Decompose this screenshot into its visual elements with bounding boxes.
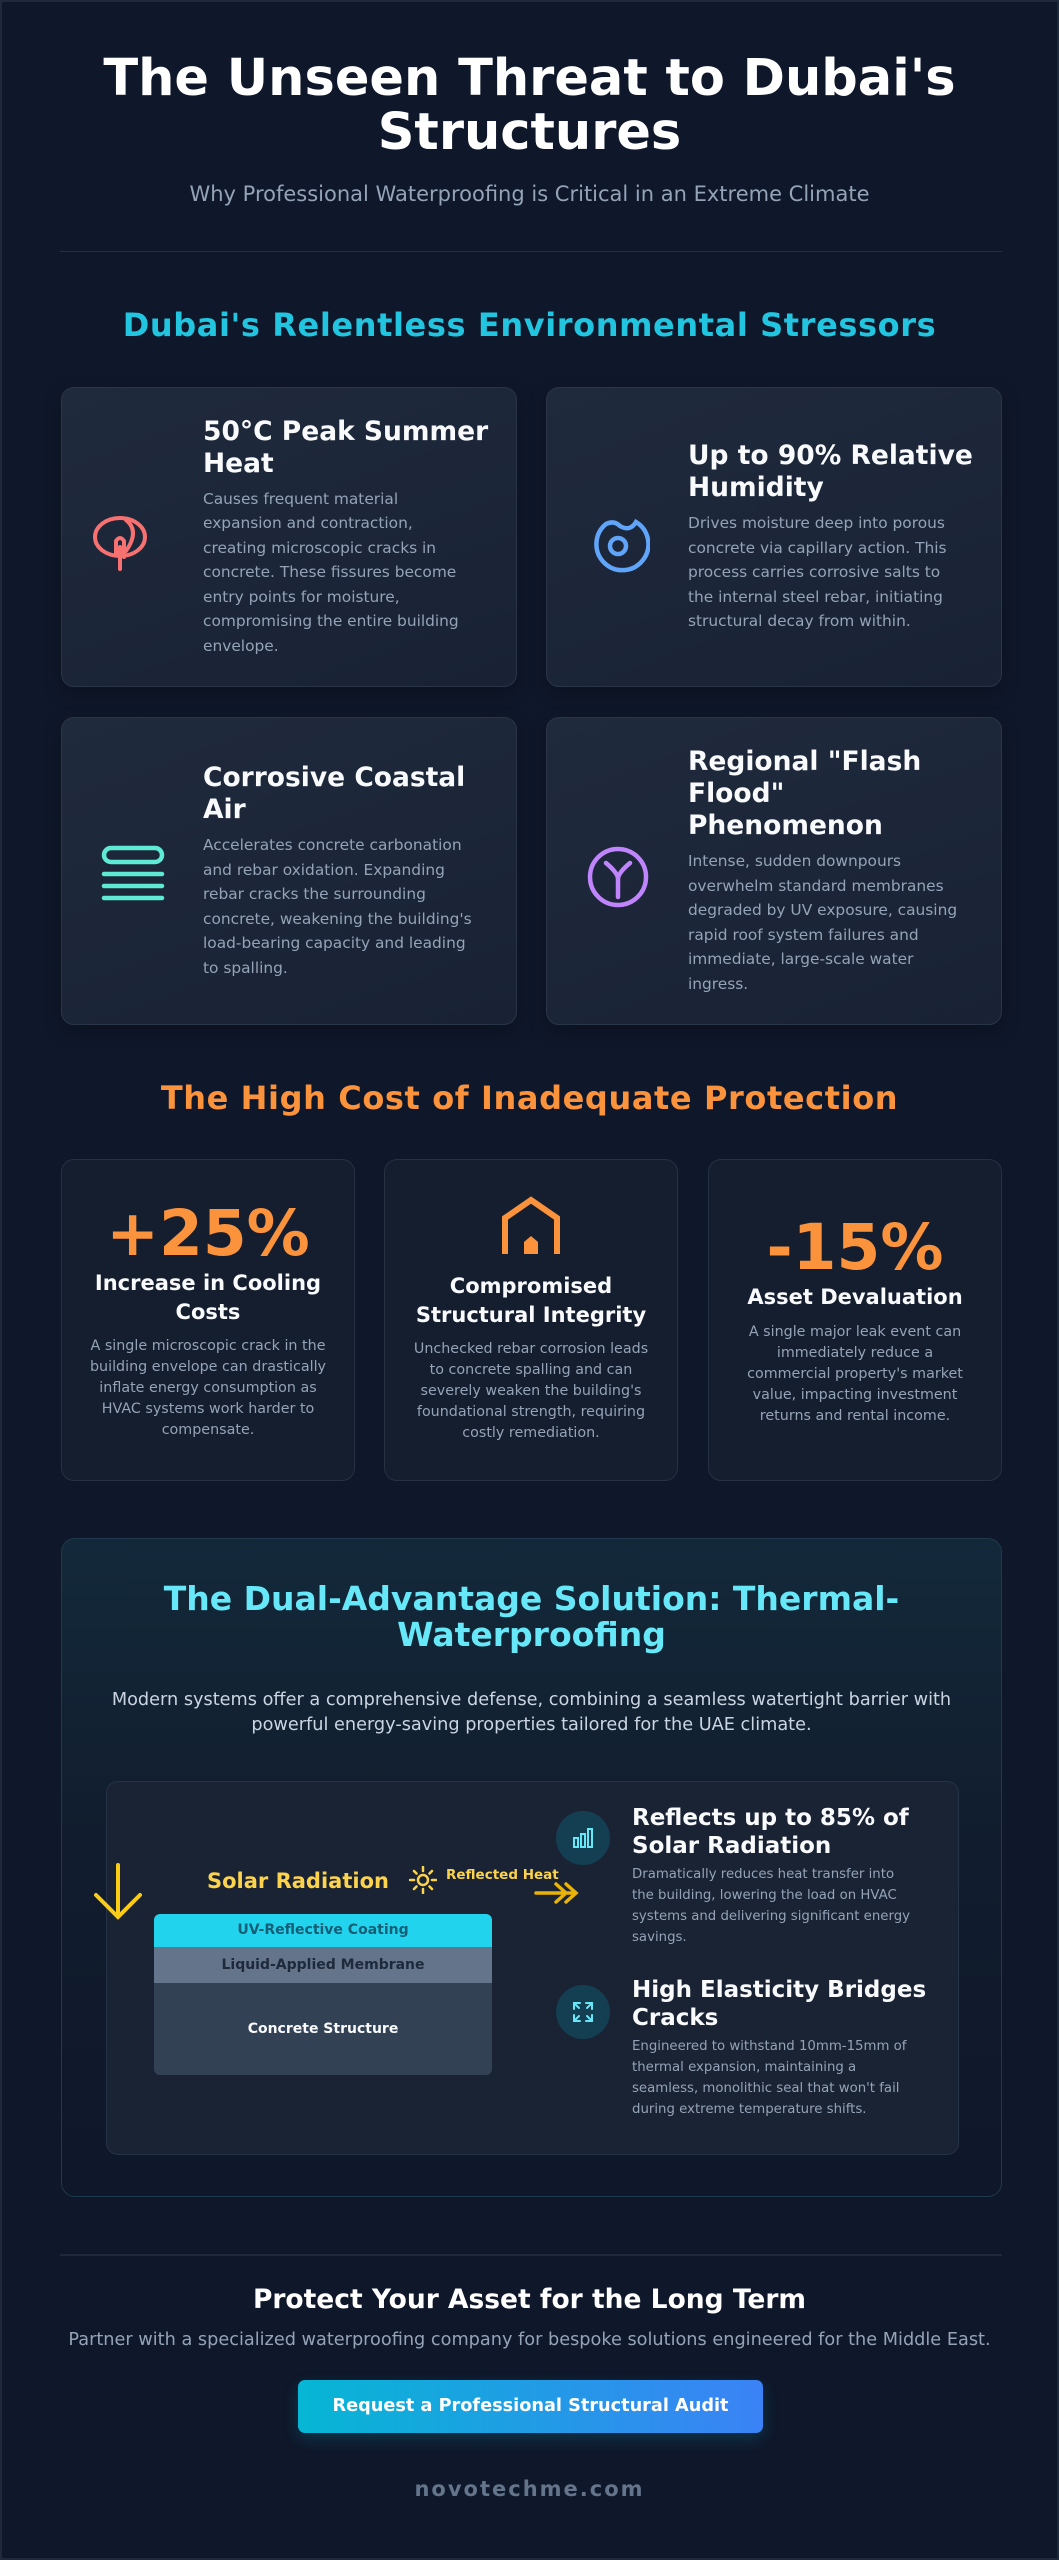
label: solar radiation: Solar Radiation xyxy=(207,1869,389,1893)
arrow: reflected xyxy=(534,1882,578,1904)
feature: elasticity: Engineered to withstand 10mm-15mm of xyxy=(632,2039,906,2054)
panel: cooling costs: Increase in Cooling xyxy=(95,1271,321,1295)
text: heat: envelope. xyxy=(203,637,279,655)
stat: +25%: +25% xyxy=(106,1197,310,1270)
panel: cooling costs xyxy=(61,1159,355,1481)
title xyxy=(103,49,956,162)
panel: heat xyxy=(61,387,517,687)
subtitle: Why Professional Waterproofing is Critical in an Extreme Climate xyxy=(189,182,870,206)
text: solution intro xyxy=(112,1690,951,1735)
layer: UV coating: UV-Reflective Coating xyxy=(237,1922,409,1938)
text: heat: compromising the entire building xyxy=(203,612,459,630)
panel: devaluation: commercial property's market xyxy=(747,1366,963,1382)
panel: devaluation: immediately reduce a xyxy=(777,1345,933,1361)
text: coastal air: Accelerates concrete carbonation xyxy=(203,836,462,854)
panel: devaluation: returns and rental income. xyxy=(760,1408,950,1424)
icon: house xyxy=(502,1196,560,1254)
feature: reflects: Reflects up to 85% of xyxy=(632,1805,909,1831)
text: humidity: Humidity xyxy=(688,472,824,503)
panel: cooling costs: inflate energy consumption as xyxy=(99,1380,317,1396)
feature: elasticity: thermal expansion, maintaining a xyxy=(632,2060,856,2075)
panel: cooling costs: HVAC systems work harder to xyxy=(102,1401,314,1417)
panel: cooling costs: building envelope can drastically xyxy=(90,1359,326,1375)
feature: elasticity: during extreme temperature shifts. xyxy=(632,2102,867,2117)
feature: elasticity xyxy=(632,1977,926,2117)
panel: structural integrity: foundational strength, requiring xyxy=(417,1404,645,1420)
panel: structural integrity: to concrete spalling and can xyxy=(430,1362,632,1378)
feature: reflects: Solar Radiation xyxy=(632,1833,831,1859)
text: flash flood: immediate, large-scale water xyxy=(688,950,913,968)
layer: concrete: Concrete Structure xyxy=(248,2021,398,2037)
text: solution intro: Modern systems offer a comprehensive defense, combining a seamless watertight barrier with xyxy=(112,1690,951,1710)
text: flash flood: Intense, sudden downpours xyxy=(688,852,901,870)
heading: call to action: Protect Your Asset for the Long Term xyxy=(253,2284,806,2315)
panel: humidity xyxy=(546,387,1002,687)
feature: reflects: systems and delivering significant energy xyxy=(632,1909,910,1924)
layer: membrane: Liquid-Applied Membrane xyxy=(221,1957,425,1973)
arrow: solar down xyxy=(94,1863,142,1920)
text: coastal air: load-bearing capacity and leading xyxy=(203,934,466,952)
text: coastal air: and rebar oxidation. Expanding xyxy=(203,860,445,878)
feature: elasticity: seamless, monolithic seal that won't fail xyxy=(632,2081,899,2096)
panel: flash flood xyxy=(546,717,1002,1025)
icon: humidity xyxy=(594,518,650,572)
text: solution intro: powerful energy-saving properties tailored for the UAE climate. xyxy=(251,1715,812,1735)
feature: elasticity: Cracks xyxy=(632,2005,718,2031)
panel: devaluation: value, impacting investment xyxy=(753,1387,957,1403)
panel: cooling costs: A single microscopic crack in the xyxy=(90,1338,326,1354)
text: coastal air: concrete, weakening the building's xyxy=(203,910,472,928)
text: coastal air: Corrosive Coastal xyxy=(203,762,465,793)
heading: solution xyxy=(164,1579,899,1654)
text: humidity: concrete via capillary action. This xyxy=(688,539,947,557)
stat: -15%: -15% xyxy=(767,1211,943,1284)
panel: devaluation: Asset Devaluation xyxy=(747,1285,963,1309)
text: flash flood: Flood" xyxy=(688,778,784,809)
text: heat: creating microscopic cracks in xyxy=(203,539,436,557)
panel: cooling costs: compensate. xyxy=(162,1422,254,1438)
button xyxy=(298,2380,763,2433)
text: flash flood: degraded by UV exposure, causing xyxy=(688,901,957,919)
text: flash flood: ingress. xyxy=(688,974,748,992)
text: heat: Heat xyxy=(203,448,274,479)
text: coastal air: Air xyxy=(203,794,246,825)
text: flash flood: overwhelm standard membranes xyxy=(688,876,944,894)
feature: elasticity: High Elasticity Bridges xyxy=(632,1977,926,2003)
layer: concrete xyxy=(154,1983,492,2075)
section heading: stressors: Dubai's Relentless Environmental Stressors xyxy=(123,306,936,344)
icon: flash flood xyxy=(588,846,648,908)
brand: novotechme.com xyxy=(414,2477,645,2501)
layer stack xyxy=(154,1914,492,2075)
text: coastal air: to spalling. xyxy=(203,958,288,976)
panel: structural integrity xyxy=(384,1159,678,1481)
panel: devaluation: A single major leak event can xyxy=(749,1324,961,1340)
label: reflected heat: Reflected Heat xyxy=(446,1867,559,1883)
panel: structural integrity: severely weaken the building's xyxy=(421,1383,641,1399)
layer: UV coating xyxy=(154,1914,492,1947)
panel: structural integrity: Structural Integrity xyxy=(416,1302,646,1326)
text: humidity: process carries corrosive salts to xyxy=(688,563,940,581)
icon: coastal air xyxy=(102,846,164,900)
button: Request a Professional Structural Audit xyxy=(332,2396,729,2416)
text: humidity: Up to 90% Relative xyxy=(688,440,973,471)
text: heat: concrete. These fissures become xyxy=(203,563,456,581)
text: humidity xyxy=(688,440,973,630)
text: coastal air xyxy=(203,762,472,976)
heading: solution: The Dual-Advantage Solution: Thermal- xyxy=(164,1579,899,1618)
panel: cooling costs: Costs xyxy=(176,1300,240,1324)
text: humidity: structural decay from within. xyxy=(688,612,911,630)
text: heat: entry points for moisture, xyxy=(203,588,400,606)
section heading: cost: The High Cost of Inadequate Protection xyxy=(161,1079,898,1117)
text: heat: Causes frequent material xyxy=(203,490,398,508)
text: flash flood: Regional "Flash xyxy=(688,746,921,777)
panel: coastal air xyxy=(61,717,517,1025)
panel: structural integrity: costly remediation. xyxy=(462,1425,600,1441)
text: cta: Partner with a specialized waterproofing company for bespoke solutions engineered for the Middle East. xyxy=(68,2330,991,2350)
text: heat: 50°C Peak Summer xyxy=(203,416,488,447)
text: humidity: Drives moisture deep into porous xyxy=(688,514,945,532)
text: flash flood: Phenomenon xyxy=(688,810,883,841)
feature: reflects: Dramatically reduces heat transfer into xyxy=(632,1867,894,1882)
feature: reflects: savings. xyxy=(632,1930,687,1945)
icon: expand xyxy=(556,1985,610,2039)
text: flash flood xyxy=(688,746,957,992)
panel: structural integrity: Compromised xyxy=(450,1274,612,1298)
text: humidity: the internal steel rebar, initiating xyxy=(688,588,943,606)
layer: membrane xyxy=(154,1947,492,1983)
title: Structures xyxy=(378,103,681,162)
text: flash flood: rapid roof system failures and xyxy=(688,926,919,944)
icon: sun xyxy=(409,1866,437,1894)
panel: devaluation xyxy=(708,1159,1002,1481)
diagram box xyxy=(106,1781,959,2155)
text: coastal air: rebar cracks the surrounding xyxy=(203,885,426,903)
feature: reflects xyxy=(632,1805,910,1945)
feature: reflects: the building, lowering the load on HVAC xyxy=(632,1888,897,1903)
text: heat: expansion and contraction, xyxy=(203,514,413,532)
icon: heat xyxy=(93,516,147,571)
panel: structural integrity: Unchecked rebar corrosion leads xyxy=(414,1341,648,1357)
title: The Unseen Threat to Dubai's xyxy=(103,49,956,108)
icon: chart xyxy=(556,1811,610,1865)
panel: solution xyxy=(61,1538,1002,2197)
text: heat xyxy=(203,416,488,655)
heading: solution: Waterproofing xyxy=(397,1615,666,1654)
